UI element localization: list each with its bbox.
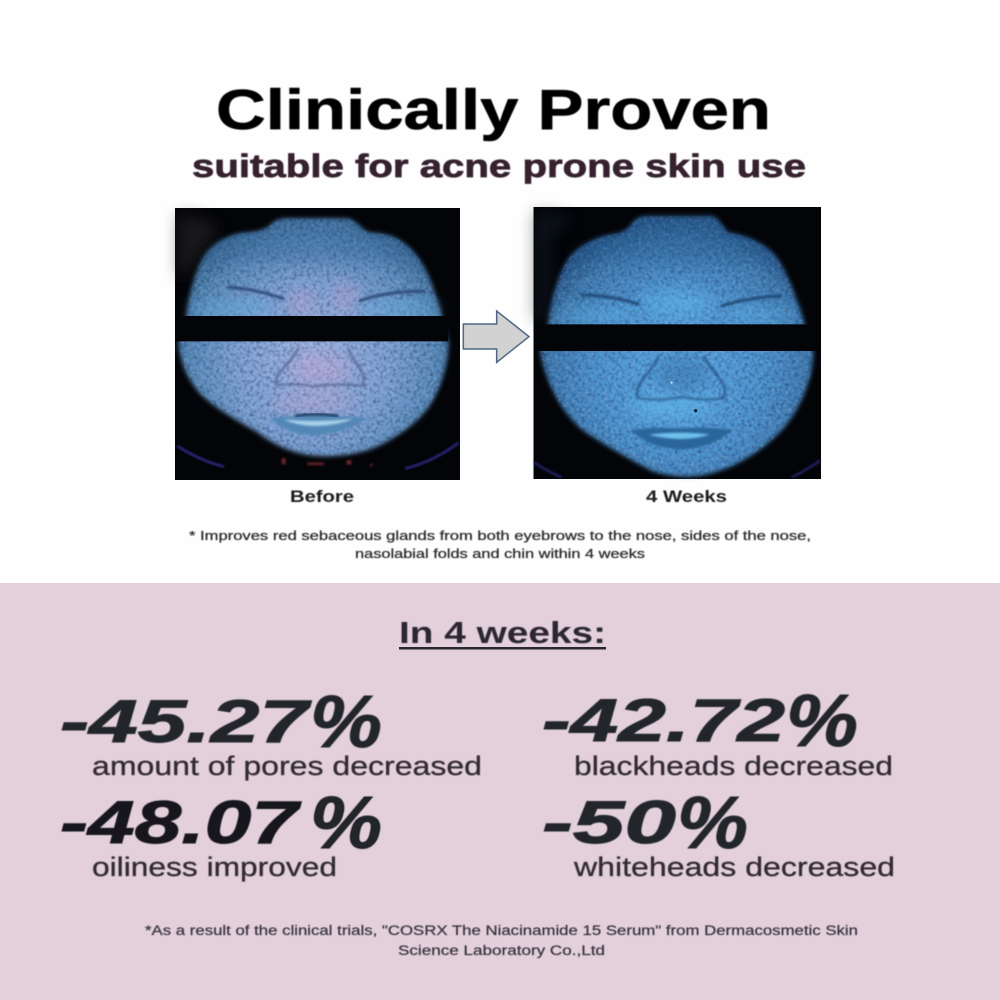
stat: pores — [60, 680, 482, 781]
stat: whiteheads: -50 — [542, 789, 676, 856]
background: pink results panel — [0, 583, 1000, 1000]
stat: oiliness — [60, 781, 382, 882]
stat: oiliness: oiliness improved — [92, 852, 337, 882]
stat: whiteheads — [542, 781, 895, 882]
title: Clinically Proven — [216, 78, 771, 142]
stat: pores: amount of pores decreased — [92, 751, 482, 781]
after photo: 4 weeks — [534, 207, 821, 480]
caption: 4 weeks: 4 Weeks — [646, 488, 727, 506]
clinical trial source note: *As a result of the clinical trials, "COSRX The Niacinamide 15 Serum" from Dermacosmetic Skin — [145, 923, 858, 938]
footnote on sebaceous glands: * Improves red sebaceous glands from both eyebrows to the nose, sides of the nose, — [189, 529, 811, 543]
subtitle: suitable for acne prone skin use — [192, 148, 806, 184]
arrow between photos — [463, 311, 529, 362]
stat: blackheads: % — [786, 679, 858, 762]
stat: whiteheads: % — [677, 781, 748, 864]
clinical trial source note: Science Laboratory Co.,Ltd — [398, 943, 605, 958]
before photo — [175, 208, 462, 480]
stat: blackheads: blackheads decreased — [574, 751, 893, 781]
footnote on sebaceous glands: nasolabial folds and chin within 4 weeks — [355, 547, 645, 561]
stat: pores: % — [310, 680, 382, 763]
stat: blackheads: -42.72 — [542, 687, 785, 754]
stat: pores: -45.27 — [60, 688, 312, 755]
stat: blackheads — [542, 679, 893, 781]
stat: oiliness: % — [310, 781, 382, 864]
stat: oiliness: -48.07 — [60, 789, 302, 856]
clinical trial source note — [145, 923, 858, 958]
results heading: In 4 weeks: — [399, 615, 606, 650]
stat: whiteheads: whiteheads decreased — [573, 852, 895, 882]
footnote on sebaceous glands — [189, 529, 811, 561]
caption: before: Before — [290, 488, 354, 506]
background: white upper section — [0, 0, 1000, 583]
